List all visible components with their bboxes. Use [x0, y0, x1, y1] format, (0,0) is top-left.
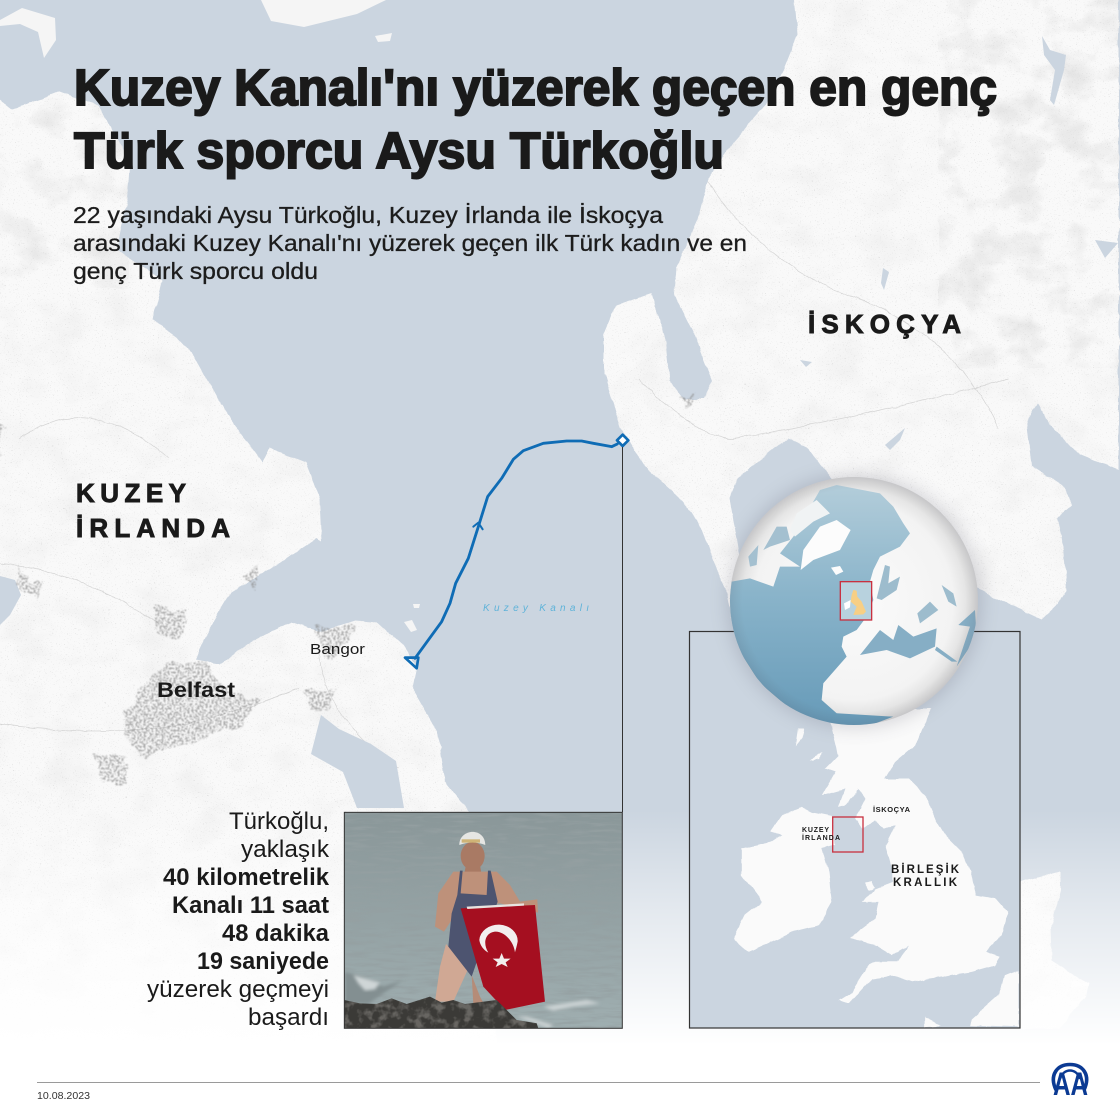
inset map: United Kingdom: [689, 631, 1020, 1028]
label: Iskocya: İSKOÇYA: [808, 309, 961, 339]
caption text: Kanalı 11 saat: [172, 892, 329, 919]
inset labels: BİRLEŞİK: [891, 863, 960, 876]
flag: [461, 903, 545, 1010]
end marker diamond: [617, 435, 628, 446]
Ireland: [735, 808, 837, 953]
title: Türk sporcu Aysu Türkoğlu: [74, 122, 724, 179]
highlight rectangle: [833, 817, 863, 852]
Black Sea: [917, 602, 938, 623]
caption text: yüzerek geçmeyi: [147, 976, 329, 1003]
title: [74, 59, 997, 179]
Great Britain: [823, 710, 1008, 1005]
islands: [0, 0, 420, 632]
caption text: 19 saniyede: [197, 948, 329, 975]
label: Belfast: Belfast: [157, 679, 235, 702]
inset labels: KRALLIK: [893, 877, 958, 889]
inset labels: [802, 805, 960, 889]
start marker triangle: [405, 658, 418, 668]
label: Kuzey Irlanda: [76, 478, 230, 543]
subtitle text: [73, 202, 747, 284]
caption text: 48 dakika: [222, 920, 330, 947]
caption text: yaklaşık: [241, 836, 330, 863]
subtitle text: 22 yaşındaki Aysu Türkoğlu, Kuzey İrlanda ile İskoçya: [73, 202, 663, 228]
label: Bangor: Bangor: [310, 642, 365, 658]
Canadian islands: [794, 500, 830, 536]
Iceland: [831, 566, 843, 575]
Mediterranean: [860, 625, 937, 658]
inset labels: İRLANDA: [802, 834, 840, 842]
leader line from route to photo: [622, 447, 624, 812]
oceans: [728, 485, 910, 727]
subtitle text: arasındaki Kuzey Kanalı'nı yüzerek geçen ilk Türk kadın ve en: [73, 230, 747, 256]
Hudson Bay: [748, 527, 790, 567]
inset labels: İSKOÇYA: [873, 805, 911, 814]
direction arrow: [473, 523, 483, 529]
urban areas around Belfast: [0, 400, 702, 790]
logo: AA: AA: [1053, 1066, 1088, 1102]
caption text: başardı: [248, 1004, 329, 1031]
rocks: [344, 997, 538, 1028]
footer rule: [37, 1082, 1040, 1084]
locator box with UK: [840, 582, 872, 620]
label: Kuzey Irlanda: İRLANDA: [76, 513, 230, 543]
caption text: 40 kilometrelik: [163, 864, 330, 891]
title: Kuzey Kanalı'nı yüzerek geçen en genç: [74, 59, 997, 116]
Red Sea and Indian Ocean: [935, 610, 977, 667]
inset frame: [690, 632, 1020, 1028]
swimmer: [435, 832, 538, 1004]
route line: [415, 441, 617, 658]
Greenland: [801, 520, 851, 570]
globe locator: [728, 474, 982, 728]
Baltic: [877, 565, 900, 600]
label: Kuzey Kanali: Kuzey Kanalı: [483, 603, 589, 614]
label: Kuzey Irlanda: KUZEY: [76, 478, 186, 508]
date: 10.08.2023: [37, 1091, 90, 1102]
Caspian: [942, 585, 957, 607]
Scottish isles: [797, 730, 823, 762]
France and Channel coast: [927, 972, 1020, 1028]
caption text: Türkoğlu,: [229, 808, 329, 835]
photo: swimmer with Turkish flag: [344, 812, 622, 1028]
caption text: [147, 808, 330, 1031]
swim route: [405, 435, 628, 668]
inset labels: KUZEY: [802, 827, 829, 834]
lake and inlet shapes: [0, 36, 1118, 808]
subtitle text: genç Türk sporcu oldu: [73, 258, 318, 284]
Anglesey: [867, 883, 877, 892]
bottom white fade: [0, 810, 1120, 1045]
